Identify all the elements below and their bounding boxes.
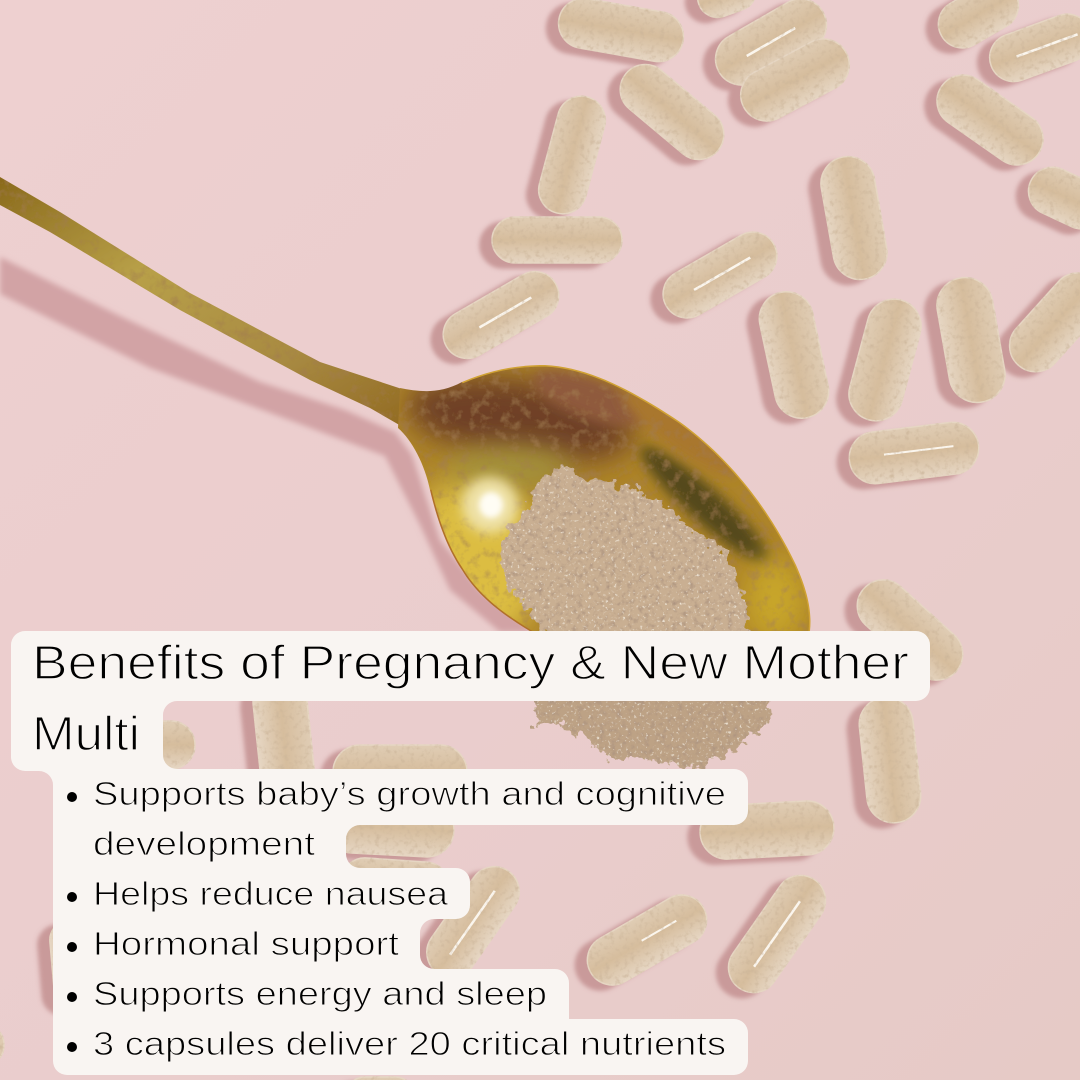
bullet: nausea: Helps reduce nausea [93, 875, 449, 912]
spoon powder [502, 466, 750, 650]
title: Multi [32, 708, 140, 761]
bullet: baby's growth: Supports baby’s growth and cognitive [93, 775, 726, 812]
powder pile on the surface [535, 690, 772, 768]
gold spoon [0, 177, 820, 650]
spoon rim [462, 365, 810, 631]
benefits list [67, 775, 726, 1062]
title [32, 637, 909, 761]
bullet: baby's growth [67, 775, 726, 862]
bullet: energy and sleep: Supports energy and sleep [93, 975, 547, 1012]
spoon handle [0, 177, 415, 434]
text panel background [11, 631, 930, 1075]
bullet: hormonal support: Hormonal support [93, 925, 399, 962]
spoon bowl [398, 365, 810, 631]
bullet: baby's growth: development [93, 825, 315, 862]
bullet: nutrients: 3 capsules deliver 20 critical nutrients [93, 1025, 726, 1062]
spoon shadow [0, 257, 535, 632]
title: Benefits of Pregnancy & New Mother [32, 637, 909, 690]
